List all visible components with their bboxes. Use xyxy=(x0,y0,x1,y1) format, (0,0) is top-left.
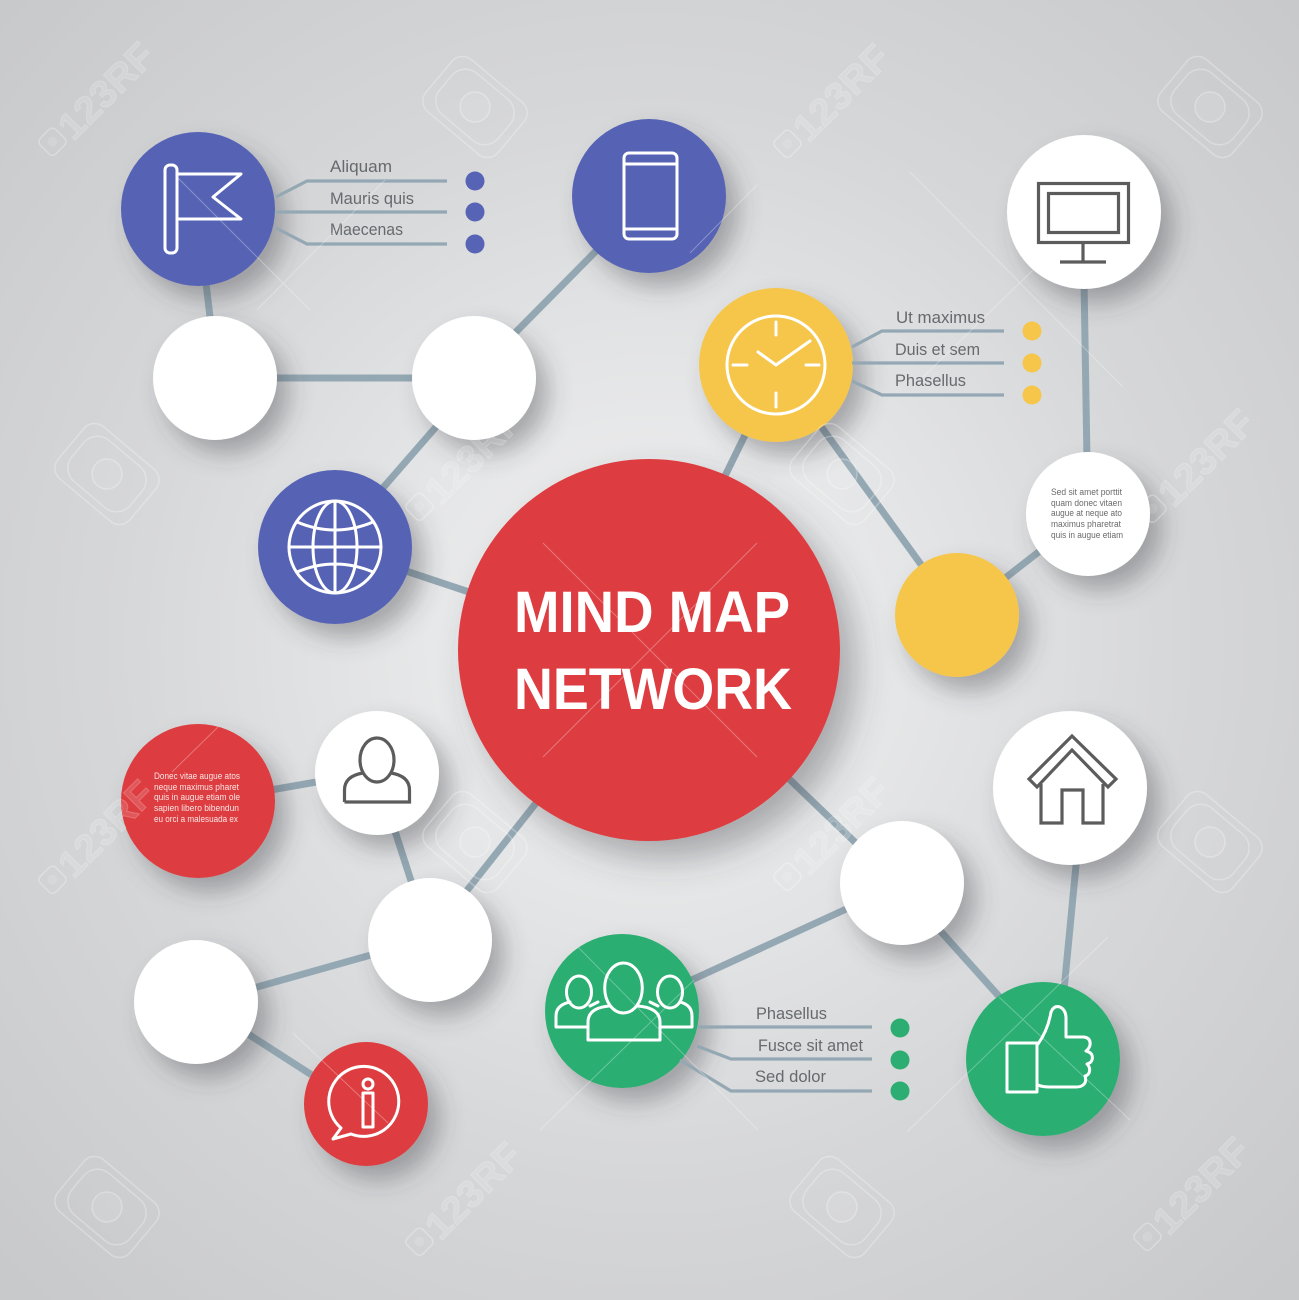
node: white bottom left xyxy=(134,940,258,1064)
text block: white node: quis in augue etiam xyxy=(1051,530,1123,540)
callout: team labels xyxy=(680,1004,910,1100)
icon: globe xyxy=(289,501,381,593)
icon: phone xyxy=(624,153,677,239)
callout: flag labels: Mauris quis xyxy=(330,189,414,208)
text block: white node: maximus pharetrat xyxy=(1051,519,1121,529)
title xyxy=(514,580,792,722)
text block: white node: quam donec vitaen xyxy=(1051,498,1122,508)
callout: flag labels xyxy=(276,157,484,254)
callout: flag labels: Maecenas xyxy=(330,220,403,239)
icon: info xyxy=(329,1066,399,1139)
node: team xyxy=(545,934,699,1088)
text block: red node: neque maximus pharet xyxy=(154,782,239,792)
text block: red node: eu orci a malesuada ex xyxy=(154,814,238,824)
title: NETWORK xyxy=(514,657,792,722)
text block: red node: sapien libero bibendun xyxy=(154,803,239,813)
callout: clock labels xyxy=(852,308,1042,404)
node: person xyxy=(315,711,439,835)
title: MIND MAP xyxy=(514,580,790,645)
text block: white node: Sed sit amet porttit xyxy=(1051,487,1122,497)
callout: team labels: Sed dolor xyxy=(755,1067,826,1086)
node: phone xyxy=(572,119,726,273)
text block: red node xyxy=(154,771,240,824)
node: white lower left xyxy=(368,878,492,1002)
callout: clock labels: Duis et sem xyxy=(895,340,980,359)
icon: team xyxy=(556,963,692,1040)
node: home xyxy=(993,711,1147,865)
callout: team labels: Phasellus xyxy=(756,1004,827,1023)
node: red text xyxy=(121,724,275,878)
text block: white node: augue at neque ato xyxy=(1051,508,1122,518)
node: white left xyxy=(153,316,277,440)
node: info xyxy=(304,1042,428,1166)
node: clock xyxy=(699,288,853,442)
text block: white node xyxy=(1051,487,1123,540)
callout: team labels: Fusce sit amet xyxy=(758,1036,863,1055)
node: monitor xyxy=(1007,135,1161,289)
node: yellow xyxy=(895,553,1019,677)
callout: clock labels: Ut maximus xyxy=(896,308,985,327)
text block: red node: Donec vitae augue atos xyxy=(154,771,240,781)
node: globe xyxy=(258,470,412,624)
callout: clock labels: Phasellus xyxy=(895,371,966,390)
icon: clock xyxy=(727,316,825,414)
node: white top middle xyxy=(412,316,536,440)
node: white text xyxy=(1026,452,1150,576)
icon: person xyxy=(344,738,410,802)
node: flag xyxy=(121,132,275,286)
node: thumbs up xyxy=(966,982,1120,1136)
icon: flag xyxy=(165,165,241,253)
connector lines xyxy=(205,247,1087,1079)
icon: home xyxy=(1029,736,1116,823)
icon: monitor xyxy=(1038,184,1128,262)
node: white lower right xyxy=(840,821,964,945)
central node xyxy=(458,459,840,841)
icon: thumbs up xyxy=(1007,1007,1092,1092)
callout: flag labels: Aliquam xyxy=(330,157,392,176)
thin highlight lines xyxy=(172,172,1130,1132)
text block: red node: quis in augue etiam ole xyxy=(154,792,240,802)
